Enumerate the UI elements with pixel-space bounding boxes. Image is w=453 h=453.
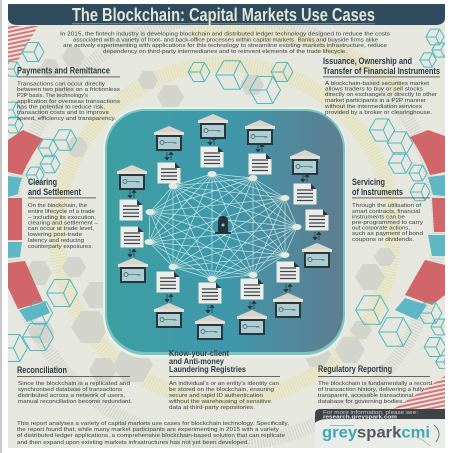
- title banner: The Blockchain: Capital Markets Use Cases: [72, 5, 375, 25]
- section: reconciliation: Since the blockchain is a replicated and: [18, 381, 130, 387]
- section: clearing and settlement: [28, 177, 99, 250]
- section: clearing and settlement: can occur at trade level,: [28, 226, 94, 232]
- section: servicing of instruments: Servicing: [352, 177, 385, 187]
- closing report summary: This report analyses a variety of capital markets use cases for blockchain technology. Specifically,: [17, 421, 289, 427]
- section: clearing and settlement: latency and reducing: [28, 238, 84, 244]
- section: payments and remittance: between two parties on a frictionless: [17, 87, 120, 93]
- section: regulatory reporting: The blockchain is fundamentally a record: [318, 381, 432, 387]
- intro text: In 2015, the fintech industry is developing blockchain and distributed ledger technology designed to reduce the costs: [60, 32, 390, 38]
- section: servicing of instruments: such as payment of bond: [352, 231, 423, 237]
- section: know-your-client and anti-money laundering registries: [168, 348, 280, 411]
- more information callout: [315, 409, 445, 423]
- section: regulatory reporting: transparent, accessible transactional: [318, 393, 413, 399]
- section: payments and remittance: application for overseas transactions: [17, 99, 120, 105]
- section: servicing of instruments: Through the utilisation of: [352, 203, 421, 209]
- section: issuance, ownership and transfer: Issuance, Ownership and: [323, 56, 412, 66]
- network nodes: [144, 171, 302, 282]
- section: clearing and settlement: On the blockchain, the: [28, 203, 87, 209]
- section: servicing of instruments: of Instruments: [352, 187, 403, 197]
- section: payments and remittance: Payments and Remittance: [17, 66, 110, 76]
- section: know-your-client and anti-money laundering registries: An individual's or an entity's identity can: [169, 381, 279, 387]
- section: know-your-client and anti-money laundering registries: Laundering Registries: [169, 364, 246, 374]
- section: regulatory reporting: [318, 364, 432, 405]
- closing report summary: [17, 421, 289, 446]
- section: issuance, ownership and transfer: allows traders to buy or sell stocks: [325, 86, 423, 92]
- section: know-your-client and anti-money laundering registries: without the warehousing of sensitive: [168, 399, 271, 405]
- section: issuance, ownership and transfer: directly on exchanges or directly to other: [325, 92, 437, 98]
- section: servicing of instruments: out corporate actions,: [352, 226, 410, 232]
- page edge: [0, 0, 2, 453]
- network mesh: [149, 174, 297, 279]
- closing report summary: and then expand upon existing markets infrastructures has not yet been developed.: [17, 440, 249, 446]
- section: clearing and settlement: and Settlement: [28, 187, 81, 197]
- section: regulatory reporting: database for governing bodies.: [318, 399, 404, 405]
- icon: bank and document pairs: [117, 114, 332, 340]
- section: reconciliation: synchronised database of transactions: [18, 387, 122, 393]
- logo: greysparkcmi: greysparkcmi: [322, 424, 430, 442]
- section: servicing of instruments: instruments can be: [352, 214, 405, 220]
- section: regulatory reporting: Regulatory Reporting: [318, 364, 392, 374]
- section: payments and remittance: transaction costs and to improve: [17, 110, 109, 116]
- section: know-your-client and anti-money laundering registries: data at third-party repositories.: [169, 405, 255, 411]
- section: reconciliation: manual reconciliation become redundant.: [18, 399, 132, 405]
- icon: central lock: [215, 216, 231, 234]
- section: servicing of instruments: [352, 177, 430, 243]
- section: issuance, ownership and transfer: A blockchain-based securities market: [325, 81, 429, 87]
- section: clearing and settlement: lowering post-trade: [28, 232, 82, 238]
- section: issuance, ownership and transfer: market participants in a P2P manner: [325, 98, 426, 104]
- section: payments and remittance: has the potential to reduce risk,: [17, 104, 105, 110]
- section: issuance, ownership and transfer: provided by a broker or clearinghouse.: [325, 110, 432, 116]
- more information callout: research.greyspark.com: [323, 415, 397, 421]
- section: servicing of instruments: smart contracts, financial: [352, 209, 420, 215]
- section: issuance, ownership and transfer: without the intermediation services: [324, 104, 422, 110]
- section: clearing and settlement: counterparty exposures.: [28, 244, 93, 250]
- section: know-your-client and anti-money laundering registries: Know-your-client: [169, 348, 229, 358]
- logo: greysparkcmi: [315, 420, 445, 448]
- intro text: dependency on third-party intermediaries and to reinvent elements of the trade lifecycle.: [103, 49, 347, 55]
- intro text: [60, 32, 390, 55]
- section: know-your-client and anti-money laundering registries: and Anti-money: [169, 356, 224, 366]
- section: clearing and settlement: Clearing: [28, 177, 57, 187]
- section: regulatory reporting: of transaction history, delivering a fully: [318, 387, 424, 393]
- section: issuance, ownership and transfer: [323, 56, 440, 116]
- section: payments and remittance: P2P basis. The technology's: [17, 93, 88, 99]
- section: know-your-client and anti-money laundering registries: be stored on the blockchain, ensuring: [169, 387, 274, 393]
- section: reconciliation: [17, 365, 132, 405]
- central blockchain panel: [103, 107, 346, 358]
- section: servicing of instruments: coupons or dividends.: [352, 237, 415, 243]
- more information callout: For more information, please see:: [323, 410, 418, 416]
- section: servicing of instruments: pre-programmed to carry: [352, 220, 423, 226]
- intro text: are actively experimenting with applications for this technology to streamline existing markets infrastructure, reduce: [63, 43, 387, 49]
- section: clearing and settlement: entire lifecycle of a trade: [28, 209, 95, 215]
- closing report summary: the report found that, while many market participants are experimenting in 2015 with a variety: [17, 427, 279, 433]
- red and teal ring segments: [8, 130, 445, 322]
- section: know-your-client and anti-money laundering registries: secure and rapid ID authentication: [169, 393, 263, 399]
- section: reconciliation: Reconciliation: [17, 365, 67, 375]
- section: reconciliation: distributed across a network of users,: [18, 393, 126, 399]
- section: payments and remittance: [17, 66, 120, 122]
- section: payments and remittance: Transactions can occur directly: [17, 82, 105, 88]
- section: clearing and settlement: clearing and settlement –: [28, 220, 99, 226]
- section: payments and remittance: speed, efficiency and transparency.: [17, 116, 117, 122]
- closing report summary: of distributed ledger applications, a comprehensive blockchain-based solution that can replicate: [17, 433, 285, 439]
- intro text: associated with a variety of front- and back-office processes within capital markets. Banks and buyside firms alike: [73, 38, 378, 44]
- section: clearing and settlement: – including its execution,: [28, 215, 96, 221]
- striped corners: [8, 26, 38, 62]
- hexagon cube outlines: [0, 29, 450, 368]
